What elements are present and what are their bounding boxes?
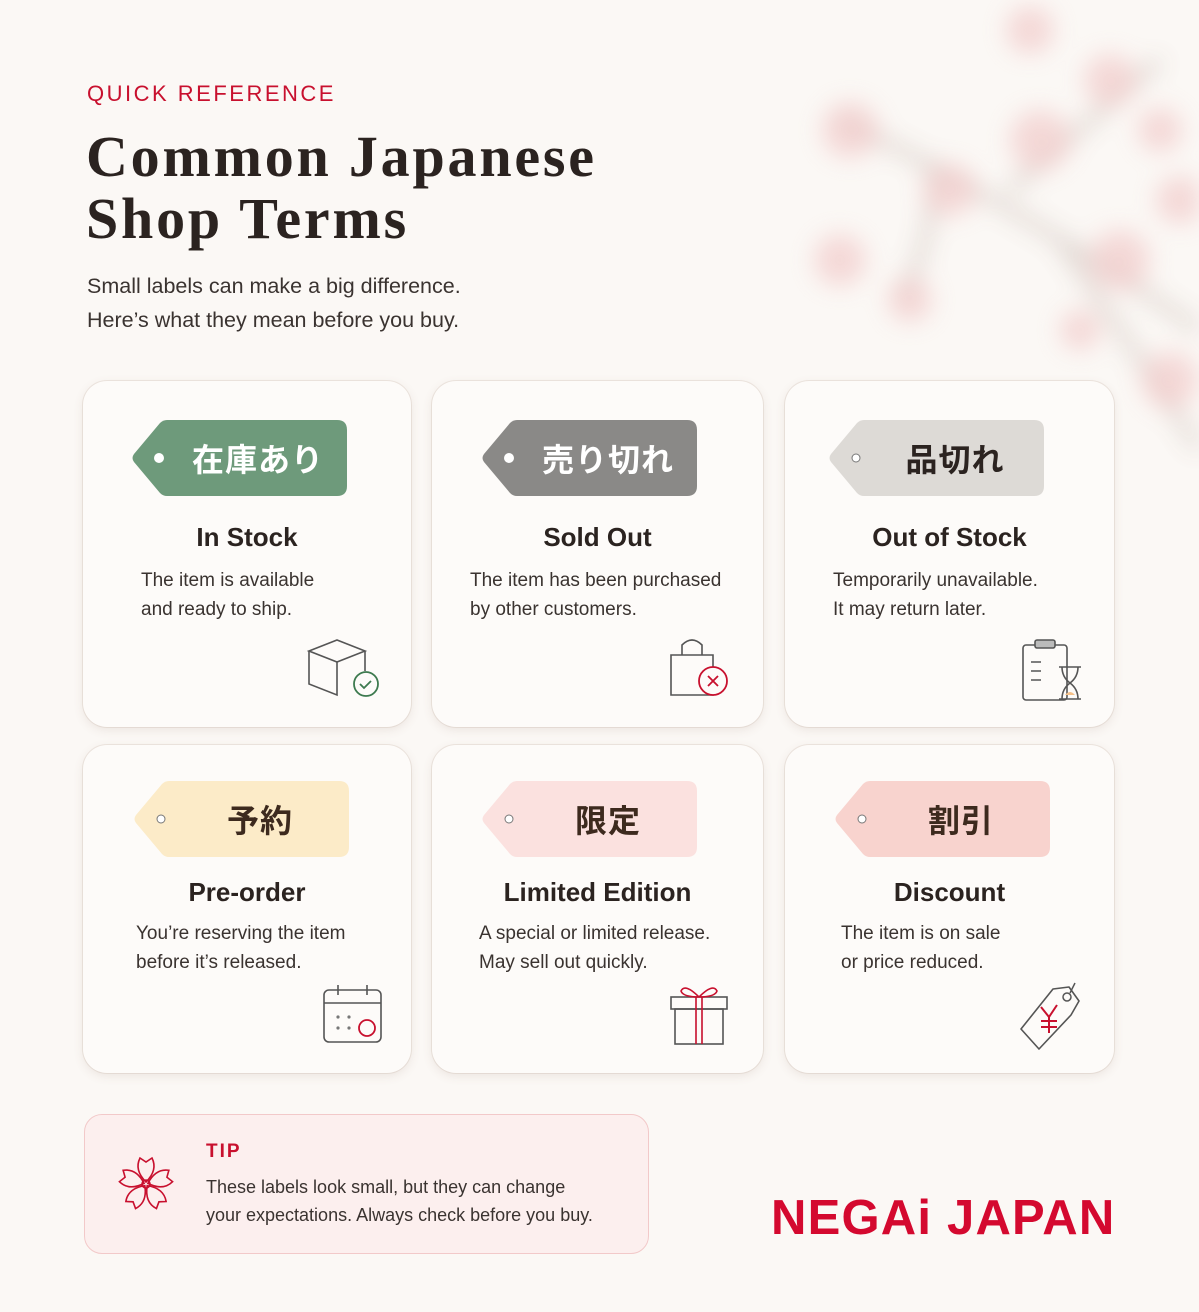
- tag: 限定: 限定: [575, 796, 641, 842]
- description: The item is on sale: [841, 923, 1000, 944]
- decorative blossom background: [808, 1, 1199, 446]
- description: before it’s released.: [136, 952, 301, 973]
- icon: bag x: [670, 639, 728, 696]
- description: May sell out quickly.: [479, 952, 648, 973]
- heading: In Stock: [196, 522, 298, 552]
- subtitle: Small labels can make a big difference.: [87, 274, 461, 298]
- icon: gift: [670, 987, 728, 1045]
- card: in stock: [83, 381, 411, 727]
- title: [86, 124, 597, 251]
- icon: clipboard hourglass: [1022, 639, 1081, 701]
- heading: Pre-order: [188, 877, 306, 907]
- heading: Discount: [894, 877, 1005, 907]
- tag: 限定: [482, 781, 697, 857]
- tag: 割引: 割引: [928, 796, 994, 842]
- tip text: These labels look small, but they can change: [206, 1177, 565, 1197]
- heading: Out of Stock: [872, 522, 1027, 552]
- title: Shop Terms: [86, 186, 409, 251]
- card: discount: [785, 745, 1114, 1073]
- description: You’re reserving the item: [136, 923, 345, 944]
- description: The item has been purchased: [470, 570, 721, 591]
- tip text: your expectations. Always check before you buy.: [206, 1205, 593, 1225]
- card: pre-order: [83, 745, 411, 1073]
- description: A special or limited release.: [479, 923, 710, 944]
- card: sold out: [432, 381, 763, 727]
- description: and ready to ship.: [141, 599, 292, 620]
- subtitle: Here’s what they mean before you buy.: [87, 308, 459, 332]
- description: [833, 570, 1038, 620]
- logo: NEGAi JAPAN: [771, 1191, 1115, 1245]
- tag: 予約: 予約: [227, 796, 293, 842]
- heading: Sold Out: [543, 522, 652, 552]
- tip box: [84, 1114, 649, 1254]
- description: or price reduced.: [841, 952, 984, 973]
- eyebrow: QUICK REFERENCE: [87, 81, 336, 106]
- description: [470, 570, 721, 620]
- heading: Limited Edition: [504, 877, 691, 907]
- description: by other customers.: [470, 599, 637, 620]
- tag: 売り切れ: [482, 420, 697, 496]
- icon: box check: [307, 639, 379, 697]
- description: [141, 570, 314, 620]
- tip text: [206, 1177, 593, 1225]
- description: [479, 923, 710, 973]
- tag: 在庫あり: 在庫あり: [192, 435, 324, 481]
- tag: 在庫あり: [132, 420, 347, 496]
- card: limited edition: [432, 745, 763, 1073]
- card: out of stock: [785, 381, 1114, 727]
- description: [841, 923, 1000, 973]
- icon: sakura: [118, 1156, 174, 1210]
- tag: 割引: [836, 781, 1050, 857]
- description: The item is available: [141, 570, 314, 591]
- tag: 品切れ: 品切れ: [905, 435, 1004, 481]
- tag: 売り切れ: 売り切れ: [542, 435, 674, 481]
- tip label: TIP: [206, 1141, 242, 1162]
- subtitle: [87, 274, 461, 332]
- description: Temporarily unavailable.: [833, 570, 1038, 591]
- icon: yen tag: [1020, 982, 1080, 1050]
- description: It may return later.: [833, 599, 986, 620]
- tag: 予約: [134, 781, 349, 857]
- description: [136, 923, 345, 973]
- title: Common Japanese: [86, 124, 597, 189]
- tag: 品切れ: [830, 420, 1044, 496]
- icon: calendar: [323, 985, 382, 1043]
